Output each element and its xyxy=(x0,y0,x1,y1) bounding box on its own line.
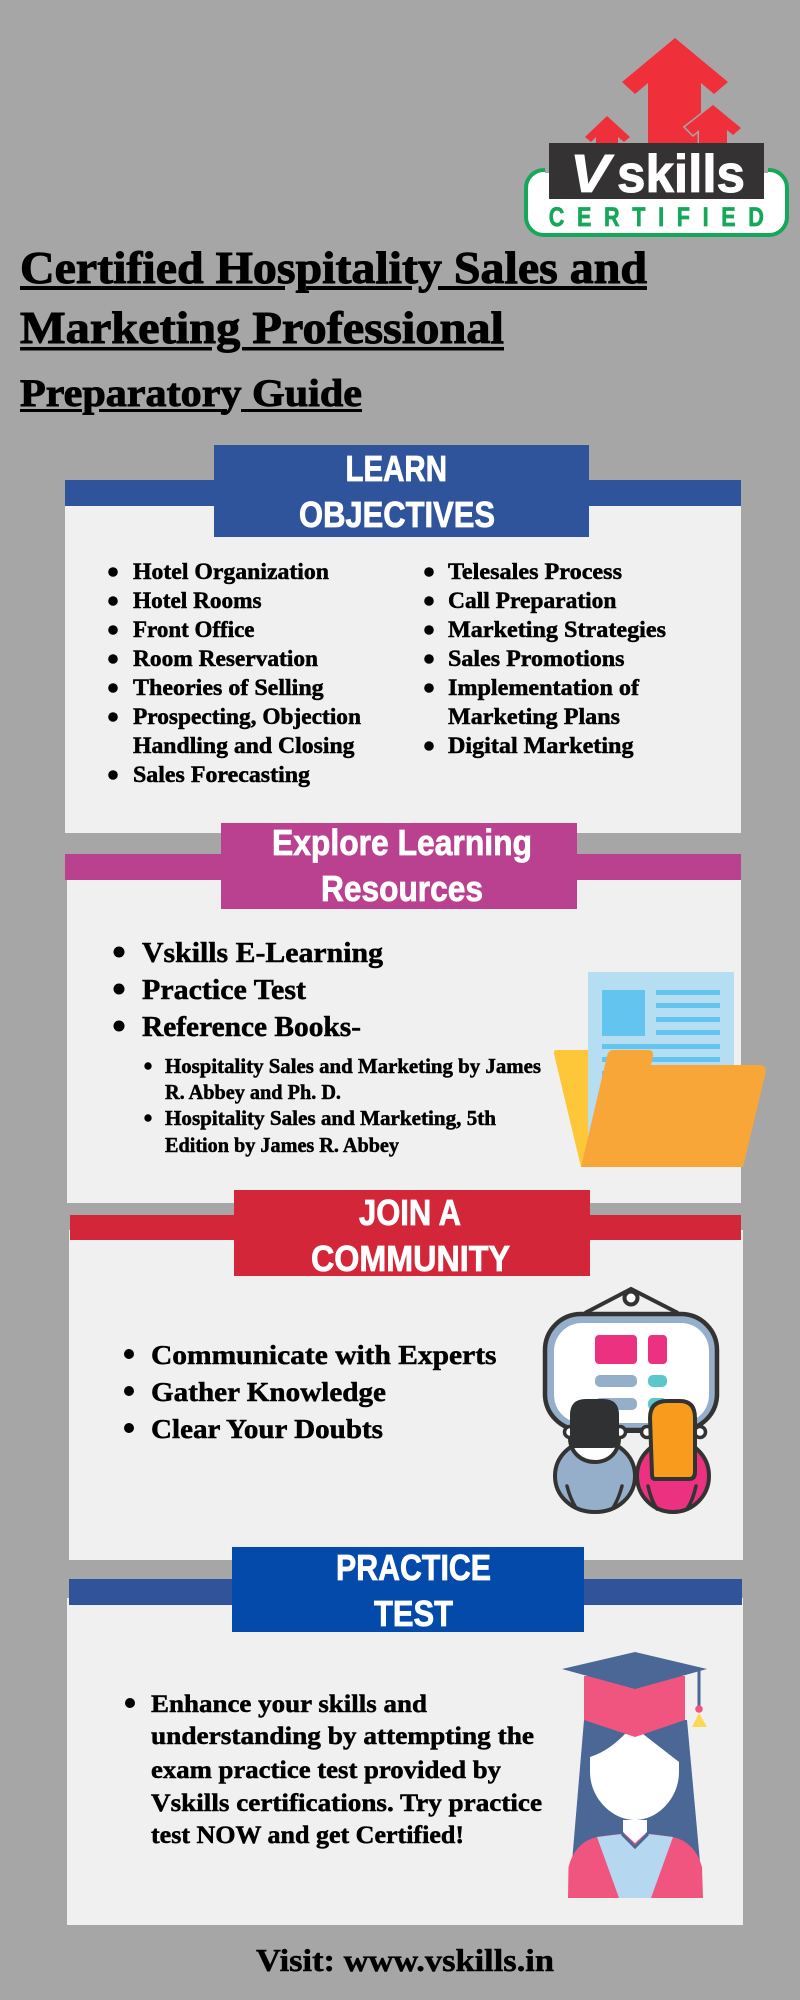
text block: practice test call to action: test NOW and get Certified! xyxy=(151,1822,464,1849)
text block: practice test call to action: exam practice test provided by xyxy=(151,1757,502,1784)
title line 1: Certified Hospitality Sales and xyxy=(20,242,647,293)
subtitle: Preparatory Guide xyxy=(20,372,362,415)
header strip xyxy=(70,1215,741,1240)
list: resources: Practice Test xyxy=(142,975,307,1006)
heading: PRACTICE xyxy=(336,1547,491,1588)
heading: Resources xyxy=(321,868,483,909)
list: community benefits xyxy=(124,1340,497,1444)
heading: JOIN A xyxy=(359,1192,461,1233)
heading: OBJECTIVES xyxy=(299,494,495,535)
text block: practice test call to action: Enhance your skills and xyxy=(151,1691,427,1718)
list: reference books: Edition by James R. Abbey xyxy=(165,1133,399,1157)
text block: practice test call to action: understanding by attempting the xyxy=(151,1723,534,1750)
list: left column: Hotel Rooms xyxy=(133,588,262,613)
panel body xyxy=(67,870,741,1203)
header box xyxy=(234,1190,590,1276)
panel: practice test xyxy=(67,1547,743,1925)
icon: graduate xyxy=(562,1652,707,1898)
list: right column: Marketing Plans xyxy=(448,704,620,729)
heading: Explore Learning xyxy=(272,822,532,863)
list: right column xyxy=(424,559,666,758)
list: left column: Room Reservation xyxy=(133,646,318,671)
panel: learn objectives xyxy=(65,445,741,833)
logo: Vskills Certified xyxy=(526,38,787,235)
header box xyxy=(214,445,589,537)
list: left column: Hotel Organization xyxy=(133,559,329,584)
list: reference books xyxy=(144,1054,541,1157)
header strip xyxy=(65,480,741,506)
list: right column: Sales Promotions xyxy=(448,646,625,671)
panel body xyxy=(67,1598,743,1925)
title line 2: Marketing Professional xyxy=(20,302,504,353)
icon: small left red arrow xyxy=(585,116,630,150)
list: right column: Digital Marketing xyxy=(448,733,634,758)
list: resources: Reference Books- xyxy=(142,1012,361,1043)
header box xyxy=(221,823,577,909)
list: community benefits: Gather Knowledge xyxy=(151,1377,386,1407)
list: left column: Front Office xyxy=(133,617,254,642)
list: community benefits: Clear Your Doubts xyxy=(151,1414,383,1444)
panel body xyxy=(69,1230,743,1560)
text block: practice test call to action xyxy=(125,1691,542,1849)
panel: explore learning resources xyxy=(65,822,766,1203)
list: left column: Handling and Closing xyxy=(133,733,355,758)
icon: small right red arrow xyxy=(685,105,741,150)
list: right column: Marketing Strategies xyxy=(448,617,666,642)
text block: practice test call to action: Vskills certifications. Try practice xyxy=(151,1790,542,1817)
logo text: skills: skills xyxy=(617,145,745,204)
list: left column xyxy=(108,559,361,787)
list: reference books: Hospitality Sales and Marketing, 5th xyxy=(165,1106,496,1130)
heading xyxy=(311,1192,510,1279)
header box xyxy=(232,1547,584,1632)
list: resources: Vskills E-Learning xyxy=(142,938,383,969)
badge: green rounded frame xyxy=(526,170,787,235)
list: resources xyxy=(114,938,383,1043)
panel: join a community xyxy=(69,1190,743,1560)
heading: COMMUNITY xyxy=(311,1238,510,1279)
footer: website link: Visit: www.vskills.in xyxy=(256,1942,554,1978)
list: left column: Prospecting, Objection xyxy=(133,704,361,729)
list: right column: Implementation of xyxy=(448,675,639,700)
heading xyxy=(299,448,495,535)
icon: two people at a board xyxy=(545,1289,717,1512)
list: right column: Telesales Process xyxy=(448,559,622,584)
list: left column: Sales Forecasting xyxy=(133,762,311,787)
heading: LEARN xyxy=(346,448,447,489)
header strip xyxy=(65,854,741,880)
heading: TEST xyxy=(374,1593,453,1634)
logo text: V: V xyxy=(570,144,614,204)
heading xyxy=(272,822,532,909)
header strip xyxy=(69,1579,742,1605)
heading xyxy=(336,1547,491,1634)
list: community benefits: Communicate with Experts xyxy=(151,1340,497,1370)
panel body xyxy=(65,490,741,833)
list: right column: Call Preparation xyxy=(448,588,617,613)
badge: dark name plate xyxy=(549,143,764,199)
list: reference books: Hospitality Sales and Marketing by James xyxy=(165,1054,541,1078)
logo text: certified: CERTIFIED xyxy=(549,203,764,233)
icon: large red arrow xyxy=(622,38,728,150)
list: reference books: R. Abbey and Ph. D. xyxy=(165,1080,341,1104)
list: left column: Theories of Selling xyxy=(133,675,324,700)
icon: folder with document xyxy=(554,972,766,1167)
title xyxy=(20,242,647,415)
